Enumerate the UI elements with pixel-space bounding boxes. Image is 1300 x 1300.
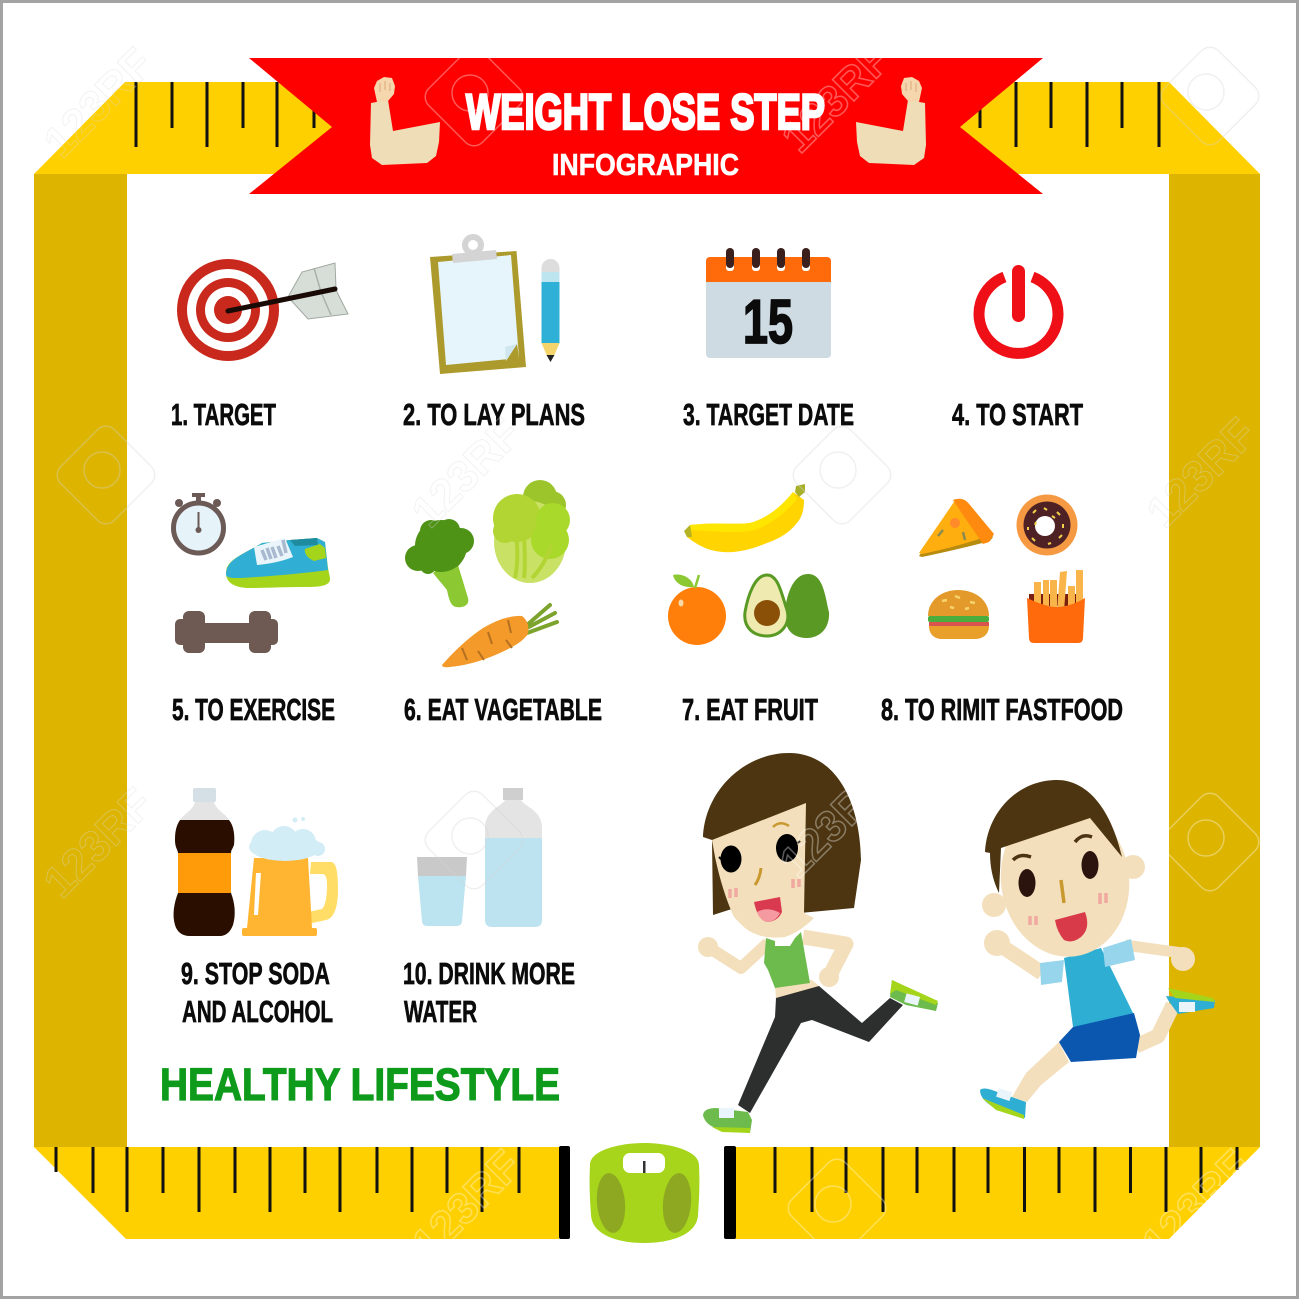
- upper shoe: [1166, 988, 1215, 1014]
- midriff: [775, 980, 819, 1000]
- lower shoe: [703, 1108, 752, 1133]
- label: 1. TARGET: [171, 397, 276, 432]
- step 9: stop soda and alcohol: [174, 788, 338, 1029]
- eyes and facial features: [719, 823, 800, 922]
- icon: avocado: [745, 574, 829, 638]
- healthy lifestyle heading: HEALTHY LIFESTYLE: [160, 1059, 560, 1110]
- left tape column: [34, 174, 127, 1147]
- right sleeve: [1103, 939, 1135, 967]
- watermarks: 123RF: [1132, 1141, 1260, 1269]
- watermarks: 123RF: [402, 409, 530, 537]
- title text: WEIGHT LOSE STEP: [466, 84, 825, 140]
- step 5: to exercise: [172, 493, 335, 727]
- watermarks: 123RF: [770, 759, 898, 887]
- icon: woman running: [698, 753, 938, 1133]
- watermarks: 123RF: [34, 39, 162, 167]
- step 7: eat fruit: [668, 484, 829, 727]
- black leggings: [738, 986, 903, 1113]
- icon: lettuce: [493, 480, 570, 583]
- icon: bathroom scale: [590, 1143, 699, 1243]
- watermarks: 123RF: [402, 1141, 530, 1269]
- face: [991, 795, 1139, 965]
- icon: left flexed arm: [370, 77, 440, 165]
- step 2: to lay plans: [403, 237, 585, 432]
- hair: [985, 780, 1122, 893]
- icon: target with arrow: [177, 259, 348, 361]
- label: 7. EAT FRUIT: [682, 692, 818, 727]
- icon: right flexed arm: [856, 77, 926, 165]
- blue shirt: [1064, 948, 1135, 1027]
- label: WATER: [404, 994, 477, 1029]
- right tape column: [1169, 174, 1260, 1147]
- back leg: [1136, 1005, 1173, 1046]
- icon: soda bottle: [174, 788, 235, 936]
- bottom right tape: [724, 1146, 1260, 1239]
- label: 6. EAT VAGETABLE: [404, 692, 602, 727]
- icon: stopwatch: [174, 493, 224, 553]
- icon: beer mug: [242, 817, 338, 936]
- ears: [982, 855, 1145, 917]
- icon: pizza slice: [919, 499, 994, 557]
- icon: glass of water: [417, 857, 467, 926]
- top right tape: [900, 82, 1260, 174]
- step 10: drink more water: [403, 788, 575, 1029]
- front leg: [1012, 1042, 1069, 1102]
- icon: donut: [1016, 494, 1078, 556]
- icon: burger: [928, 590, 989, 639]
- step 8: limit fast food: [881, 494, 1123, 727]
- ribbon: [249, 58, 1043, 194]
- arms: [698, 937, 846, 987]
- label: 2. TO LAY PLANS: [403, 397, 585, 432]
- subtitle text: INFOGRAPHIC: [552, 147, 739, 182]
- top left tape: [34, 82, 400, 174]
- lower shoe: [980, 1088, 1026, 1119]
- label: 4. TO START: [952, 397, 1083, 432]
- hair: [703, 753, 861, 915]
- step 6: eat vegetable: [404, 480, 602, 727]
- icon: water bottle: [485, 788, 542, 927]
- label: 10. DRINK MORE: [403, 956, 575, 991]
- green tank top: [764, 932, 810, 988]
- icon: clipboard and pencil: [430, 237, 560, 374]
- shorts: [1059, 1013, 1140, 1062]
- icon: fries: [1027, 570, 1085, 643]
- label: 9. STOP SODA: [181, 956, 330, 991]
- label: AND ALCOHOL: [182, 994, 333, 1029]
- icon: calendar: 15: [743, 288, 793, 357]
- icon: broccoli: [405, 519, 474, 607]
- icon: carrot: [442, 605, 557, 667]
- icon: power button: [979, 265, 1058, 353]
- watermarks: 123RF: [772, 34, 900, 162]
- facial features: [1013, 836, 1106, 941]
- icon: dumbbell: [175, 611, 278, 653]
- left sleeve: [1040, 960, 1064, 985]
- icon: calendar: [706, 248, 831, 358]
- label: 3. TARGET DATE: [683, 397, 854, 432]
- bottom left tape: [34, 1146, 570, 1239]
- icon: banana: [684, 484, 805, 552]
- label: 8. TO RIMIT FASTFOOD: [881, 692, 1123, 727]
- step 3: target date: [683, 248, 854, 432]
- icon: man running: [980, 780, 1215, 1119]
- arms: [984, 930, 1195, 973]
- label: 5. TO EXERCISE: [172, 692, 335, 727]
- step 4: to start: [952, 265, 1083, 432]
- face: [712, 803, 814, 938]
- upper shoe: [890, 980, 938, 1011]
- watermarks: 123RF: [1137, 409, 1265, 537]
- watermarks: 123RF: [34, 779, 162, 907]
- icon: running shoe: [226, 538, 330, 588]
- icon: orange: [668, 575, 726, 645]
- step 1: target: [171, 259, 348, 432]
- title banner: [249, 58, 1043, 194]
